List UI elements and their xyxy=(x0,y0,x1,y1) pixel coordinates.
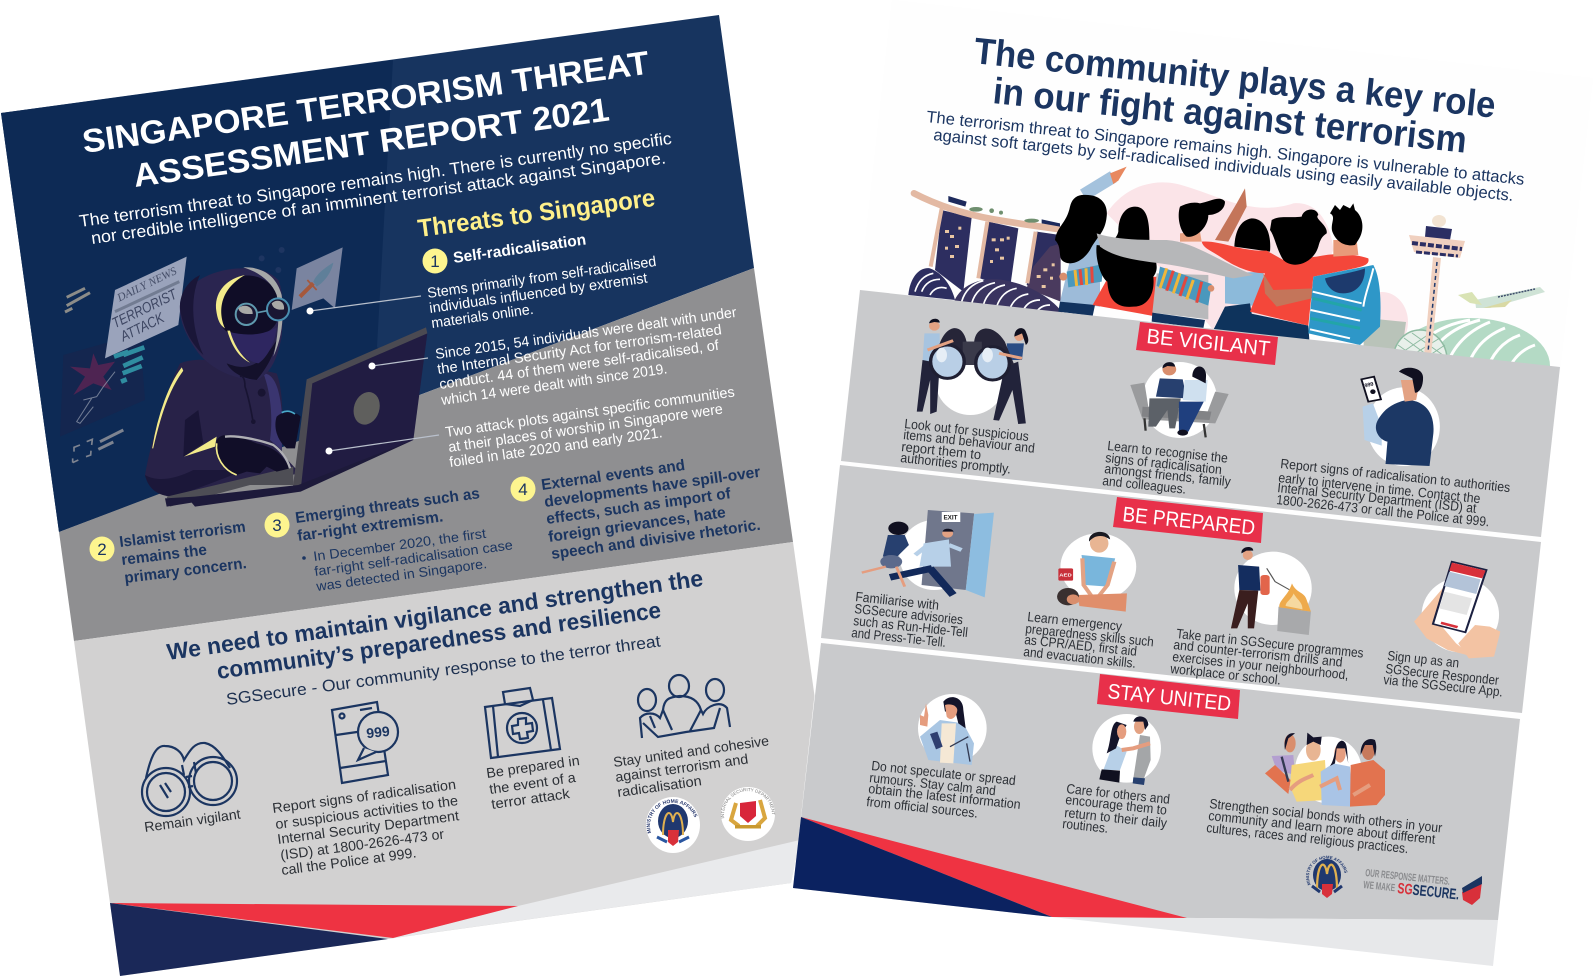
threat 3: 3 xyxy=(272,516,282,535)
illustration: couple on couch xyxy=(1130,362,1229,438)
threat 2: 2 xyxy=(97,540,107,559)
caption: care for others: Care for others and xyxy=(1066,781,1171,807)
heading: vigilance message: SGSecure - Our community response to the terror threat xyxy=(225,632,662,709)
caption: do not speculate: rumours. Stay calm and xyxy=(869,770,997,798)
caption: emergency skills: and evacuation skills. xyxy=(1023,644,1137,671)
caption: strengthen social bonds: cultures, races and religious practices. xyxy=(1206,820,1409,856)
heading: vigilance message: We need to maintain vigilance and strengthen the xyxy=(165,565,705,665)
caption: do not speculate: obtain the latest information xyxy=(868,781,1021,812)
threat 1 details with callouts: Stems primarily from self-radicalised xyxy=(426,254,657,302)
threat 4: effects, such as import of xyxy=(545,485,733,528)
caption: learn to recognise: signs of radicalisation xyxy=(1105,450,1223,477)
threat 3: far-right self-radicalisation case xyxy=(313,537,514,579)
heading: threats to Singapore: Threats to Singapore xyxy=(416,184,657,243)
caption: strengthen social bonds xyxy=(1206,796,1443,856)
caption: report signs: Internal Security Department (ISD) at xyxy=(1277,480,1477,516)
illustration: couple with giant binoculars xyxy=(917,319,1028,424)
threat 4: External events and xyxy=(540,457,686,494)
illustration: man with phone: 999 xyxy=(1364,381,1374,389)
threat 2: primary concern. xyxy=(123,555,248,587)
icon: first aid case xyxy=(485,688,560,758)
caption: take part: Take part in SGSecure programmes xyxy=(1176,626,1364,661)
section backgrounds xyxy=(793,290,1560,966)
caption: take part xyxy=(1169,626,1364,688)
caption: look out xyxy=(900,416,1036,477)
icon: binoculars xyxy=(142,743,237,816)
banner: be prepared: BE PREPARED xyxy=(1121,503,1256,540)
caption: sign up xyxy=(1383,648,1504,700)
caption: familiarise: such as Run-Hide-Tell xyxy=(853,613,969,640)
illustration: diverse community group xyxy=(1265,733,1385,807)
caption: stay united: Stay united and cohesive xyxy=(612,732,770,770)
threat 1 details with callouts: individuals influenced by extremist xyxy=(428,270,648,317)
caption: stay united: radicalisation xyxy=(616,772,703,800)
caption: familiarise: Familiarise with xyxy=(855,589,940,613)
caption: take part: workplace or school. xyxy=(1169,661,1282,688)
icon: phone 999: 999 xyxy=(366,723,391,741)
caption: care for others: encourage them to xyxy=(1065,792,1168,818)
illustration: care for others xyxy=(1092,714,1161,785)
threat 2: Islamist terrorism xyxy=(118,519,247,551)
threat 1: Self-radicalisation xyxy=(452,231,587,267)
caption: emergency skills: Learn emergency xyxy=(1027,609,1123,634)
poster sheet xyxy=(793,0,1593,966)
panel: threat assessment poster xyxy=(1,15,814,976)
caption: strengthen social bonds: Strengthen social bonds with others in your xyxy=(1209,796,1443,835)
caption: stay united xyxy=(612,732,770,800)
threat 1 details with callouts: materials online. xyxy=(430,302,535,332)
caption: do not speculate: Do not speculate or spread xyxy=(871,758,1016,788)
caption: emergency skills: as CPR/AED, first aid xyxy=(1024,632,1138,659)
threat 1: 1 xyxy=(430,252,440,271)
illustration: hooded hacker at laptop: ATTACK xyxy=(117,310,168,346)
caption: look out: report them to xyxy=(901,439,982,462)
poster background xyxy=(1,15,820,976)
caption: familiarise xyxy=(851,589,969,650)
threat 1 details with callouts: Since 2015, 54 individuals were dealt with under xyxy=(434,305,738,363)
threat 1 details with callouts: the Internal Security Act for terrorism-related xyxy=(436,322,723,378)
logo: Internal Security Department xyxy=(720,787,776,841)
caption: care for others: routines. xyxy=(1062,816,1109,836)
threat 4: 4 xyxy=(518,480,528,499)
caption: report signs: early to intervene in time. Contact the xyxy=(1278,470,1481,506)
caption: sign up: Sign up as an xyxy=(1387,648,1460,671)
heading: vigilance message: community’s preparedness and resilience xyxy=(215,597,662,684)
caption: be prepared: the event of a xyxy=(488,769,577,797)
title: The community plays a key role xyxy=(972,30,1498,126)
caption: report signs: Report signs of radicalisation xyxy=(271,776,457,816)
threat 3: In December 2020, the first xyxy=(312,526,487,564)
caption: report signs: 1800-2626-473 or call the Police at 999. xyxy=(1276,492,1490,529)
caption: care for others xyxy=(1062,781,1171,836)
caption: be prepared: Be prepared in xyxy=(485,752,581,781)
threat 4: foreign grievances, hate xyxy=(547,504,727,546)
caption: learn to recognise: and colleagues. xyxy=(1102,473,1187,497)
intro text: nor credible intelligence of an imminent terrorist attack against Singapore. xyxy=(90,148,667,248)
caption: report signs: (ISD) at 1800-2626-473 or xyxy=(279,826,445,863)
logo: Internal Security Department: INTERNAL SECURITY DEPARTMENT xyxy=(720,788,776,818)
threat 2: remains the xyxy=(120,542,208,569)
threat 3: was detected in Singapore. xyxy=(314,556,488,594)
caption: report signs xyxy=(271,776,460,878)
illustration: running to exit xyxy=(862,510,994,597)
illustration: woman with phone xyxy=(918,694,987,765)
heading: vigilance message xyxy=(165,565,705,709)
caption: be prepared: terror attack xyxy=(490,785,572,812)
banner: be vigilant: BE VIGILANT xyxy=(1145,325,1271,361)
illustration: CPR xyxy=(1057,532,1136,612)
caption: familiarise: SGSecure advisories xyxy=(854,601,964,627)
threat 1 details with callouts xyxy=(306,254,738,471)
threat 4: speech and divisive rhetoric. xyxy=(550,517,762,563)
icon: united people xyxy=(638,675,730,738)
illustration: tower, airport dome and plane xyxy=(1356,215,1550,414)
caption: emergency skills: preparedness skills such xyxy=(1025,621,1155,649)
threat 1 details with callouts: Two attack plots against specific communities xyxy=(444,384,736,441)
logo: SGSecure slogan: OUR RESPONSE MATTERS. xyxy=(1365,867,1451,888)
caption: report signs: Internal Security Department xyxy=(276,807,460,847)
caption: take part: and counter-terrorism drills and xyxy=(1173,637,1343,670)
caption: be prepared xyxy=(485,752,581,812)
threat 2 xyxy=(90,519,248,587)
illustration: hooded hacker at laptop xyxy=(60,247,427,507)
illustration: man with phone xyxy=(1361,368,1440,466)
logo: SGSecure slogan: WE MAKE xyxy=(1363,879,1396,894)
caption: look out: authorities promptly. xyxy=(900,450,1012,477)
illustration: running to exit: EXIT xyxy=(943,514,958,521)
caption: look out: Look out for suspicious xyxy=(904,416,1030,444)
logo: SGSecure slogan xyxy=(1363,867,1482,905)
logo: SGSecure slogan: SGSECURE. xyxy=(1397,880,1460,903)
threat 4 xyxy=(510,457,762,563)
threat 1 details with callouts: foiled in late 2020 and early 2021. xyxy=(448,425,663,471)
illustration: SGSecure app xyxy=(1414,562,1500,658)
caption: report signs: call the Police at 999. xyxy=(280,844,417,878)
caption: report signs: Report signs of radicalisation to authorities xyxy=(1280,456,1511,495)
threat 1 details with callouts: conduct. 44 of them were self-radicalised, of xyxy=(438,338,721,393)
logo: Ministry of Home Affairs xyxy=(646,797,700,853)
threat 1 xyxy=(422,231,587,274)
intro text: The terrorism threat to Singapore remains high. There is currently no specific xyxy=(78,129,673,231)
caption: learn to recognise: Learn to recognise the xyxy=(1107,438,1229,466)
panel: community role poster xyxy=(793,30,1560,966)
logo: Ministry of Home Affairs: MINISTRY OF HOME AFFAIRS xyxy=(1306,856,1348,886)
caption: remain vigilant: Remain vigilant xyxy=(143,806,242,835)
illustration: hooded hacker at laptop: TERRORIST xyxy=(110,286,180,332)
caption: look out: items and behaviour and xyxy=(903,427,1036,456)
intro text: The terrorism threat to Singapore remains high. Singapore is vulnerable to attacks xyxy=(926,108,1525,189)
threat 4: developments have spill-over xyxy=(543,464,761,511)
caption: stay united: against terrorism and xyxy=(614,750,749,785)
title: ASSESSMENT REPORT 2021 xyxy=(131,90,611,194)
caption: report signs xyxy=(1276,456,1511,529)
illustration: skyline and people xyxy=(908,167,1381,345)
caption: care for others: return to their daily xyxy=(1064,805,1168,831)
illustration: hooded hacker at laptop: DAILY NEWS xyxy=(114,265,179,305)
caption: learn to recognise: amongst friends, family xyxy=(1104,461,1232,489)
caption: do not speculate: from official sources. xyxy=(866,794,979,821)
threat 3: far-right extremism. xyxy=(296,508,444,545)
threat 1 details with callouts: which 14 were dealt with since 2019. xyxy=(439,361,668,409)
caption: do not speculate xyxy=(866,758,1021,821)
threat 1 details with callouts: at their places of worship in Singapore were xyxy=(447,402,724,456)
title: SINGAPORE TERRORISM THREAT xyxy=(80,44,651,160)
logo: Ministry of Home Affairs xyxy=(1306,856,1348,898)
logo: Ministry of Home Affairs: MINISTRY OF HOME AFFAIRS xyxy=(646,799,698,834)
threat 3: Emerging threats such as xyxy=(294,485,481,527)
intro text: against soft targets by self-radicalised individuals using easily available objects. xyxy=(933,126,1514,205)
caption: learn to recognise xyxy=(1102,438,1232,497)
illustration: fire drill xyxy=(1231,547,1312,635)
icon: phone 999 xyxy=(332,702,398,783)
caption: take part: exercises in your neighbourhood, xyxy=(1172,649,1349,682)
title: in our fight against terrorism xyxy=(991,70,1469,161)
illustration: CPR: AED xyxy=(1059,573,1072,578)
caption: emergency skills xyxy=(1023,609,1155,671)
caption: sign up: via the SGSecure App. xyxy=(1383,672,1504,700)
caption: sign up: SGSecure Responder xyxy=(1385,661,1500,688)
caption: strengthen social bonds: community and learn more about different xyxy=(1208,808,1436,847)
caption: familiarise: and Press-Tie-Tell. xyxy=(851,625,947,650)
threat 3 xyxy=(264,485,514,594)
caption: report signs: or suspicious activities to the xyxy=(274,792,459,832)
banner: stay united: STAY UNITED xyxy=(1106,680,1232,716)
